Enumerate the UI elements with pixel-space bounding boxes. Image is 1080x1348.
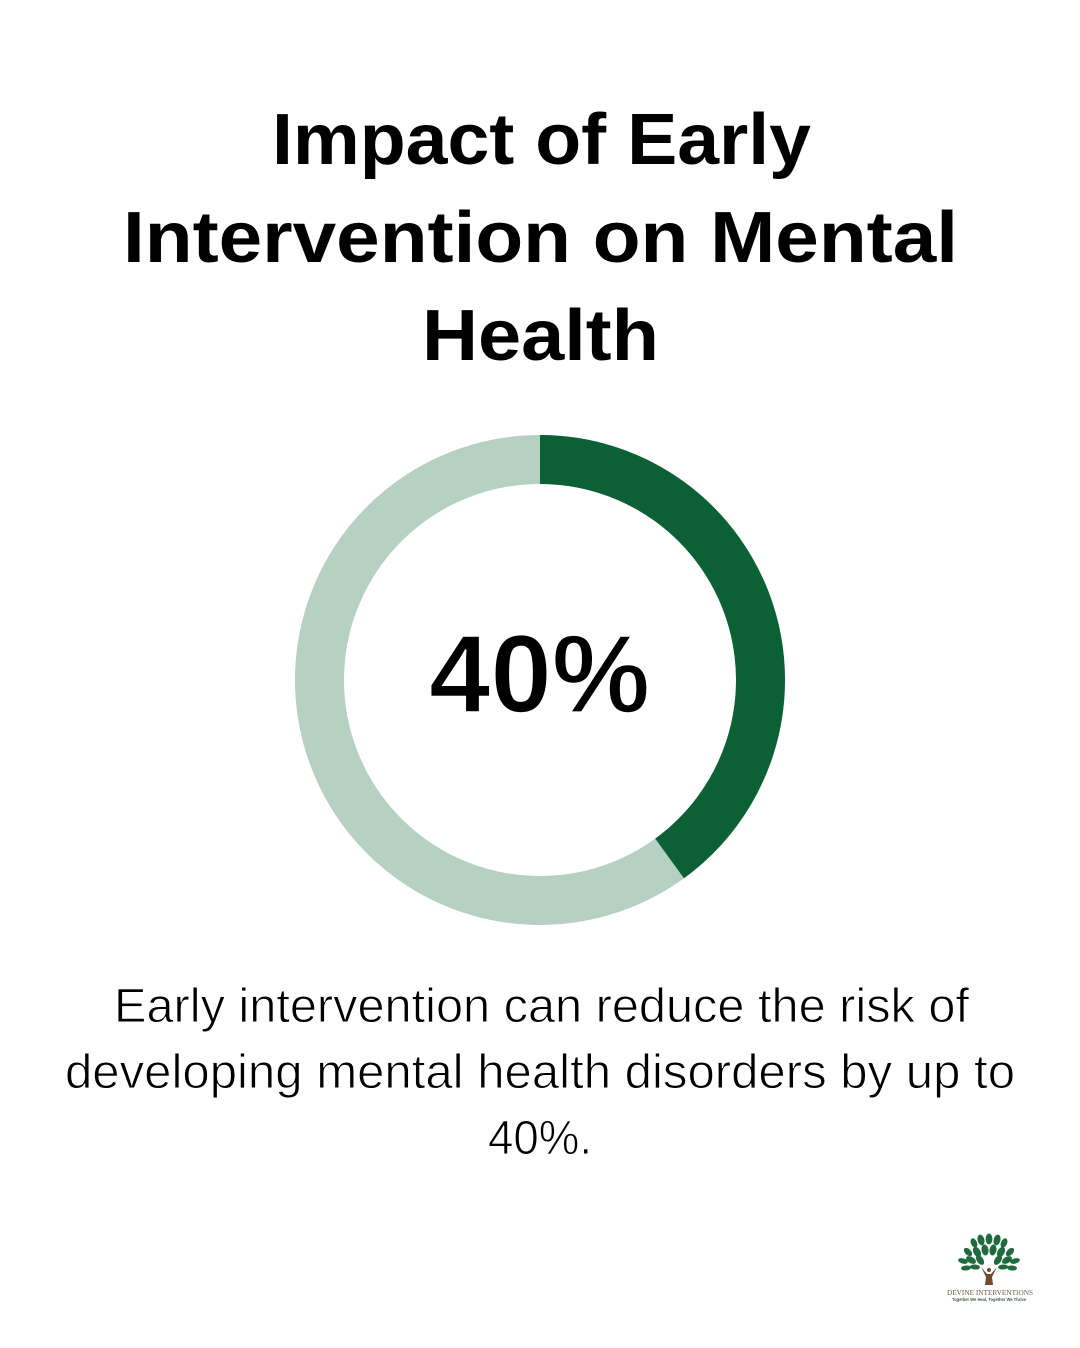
title: Health	[422, 296, 659, 376]
icon: tree trunk figure	[981, 1267, 997, 1285]
donut value arc	[540, 460, 761, 858]
description text: 40%.	[488, 1112, 592, 1165]
title	[123, 100, 958, 376]
logo tagline: Together We Heal, Together We Thrive	[952, 1297, 1026, 1302]
title: Intervention on Mental	[123, 198, 958, 278]
description text: developing mental health disorders by up to	[65, 1046, 1015, 1099]
logo name: DEVINE INTERVENTIONS	[947, 1289, 1033, 1297]
description text	[65, 980, 1015, 1165]
description text: Early intervention can reduce the risk of	[114, 980, 970, 1033]
donut chart: 40%	[320, 460, 761, 900]
logo: Devine Interventions	[947, 1234, 1033, 1302]
title: Impact of Early	[272, 100, 811, 180]
icon: tree leaves	[957, 1234, 1021, 1271]
donut track	[320, 460, 760, 900]
donut center value: 40%	[429, 613, 650, 736]
